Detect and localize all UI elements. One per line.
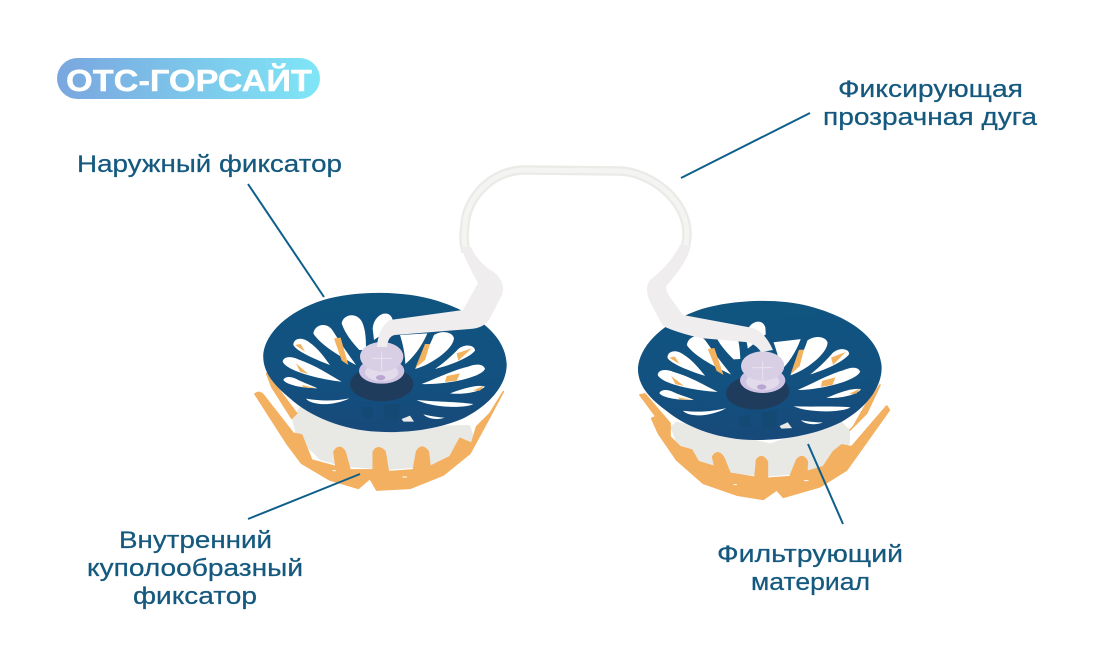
label: transparent bridge: [823, 76, 1038, 131]
transparent fixing bridge: [377, 170, 773, 352]
label: filter material: материал: [751, 569, 870, 596]
device: right filter: [635, 295, 889, 499]
filter material left: [292, 407, 475, 470]
label: external fixator: Наружный фиксатор: [77, 151, 342, 178]
device: left filter: [255, 293, 507, 490]
label: filter material: [717, 541, 903, 596]
leader line: filter material: [808, 444, 843, 524]
filter material right: [670, 420, 850, 477]
brand badge: ОТС-ГОРСАЙТ: [66, 62, 312, 98]
right arm: [647, 245, 773, 352]
leader line: external fixator: [248, 184, 324, 297]
orange dome fixator left: [255, 373, 503, 490]
label: internal dome fixator: фиксатор: [133, 583, 257, 610]
label: transparent bridge: прозрачная дуга: [823, 104, 1038, 131]
label: internal dome fixator: [87, 527, 303, 610]
label: filter material: Фильтрующий: [717, 541, 903, 568]
label: transparent bridge: Фиксирующая: [838, 76, 1023, 103]
label: internal dome fixator: куполообразный: [87, 555, 303, 582]
orange dome fixator right: [640, 385, 889, 499]
left arm: [377, 247, 503, 347]
leader line: transparent bridge: [681, 113, 810, 178]
leader line: internal dome fixator: [248, 474, 360, 519]
label: internal dome fixator: Внутренний: [119, 527, 272, 554]
